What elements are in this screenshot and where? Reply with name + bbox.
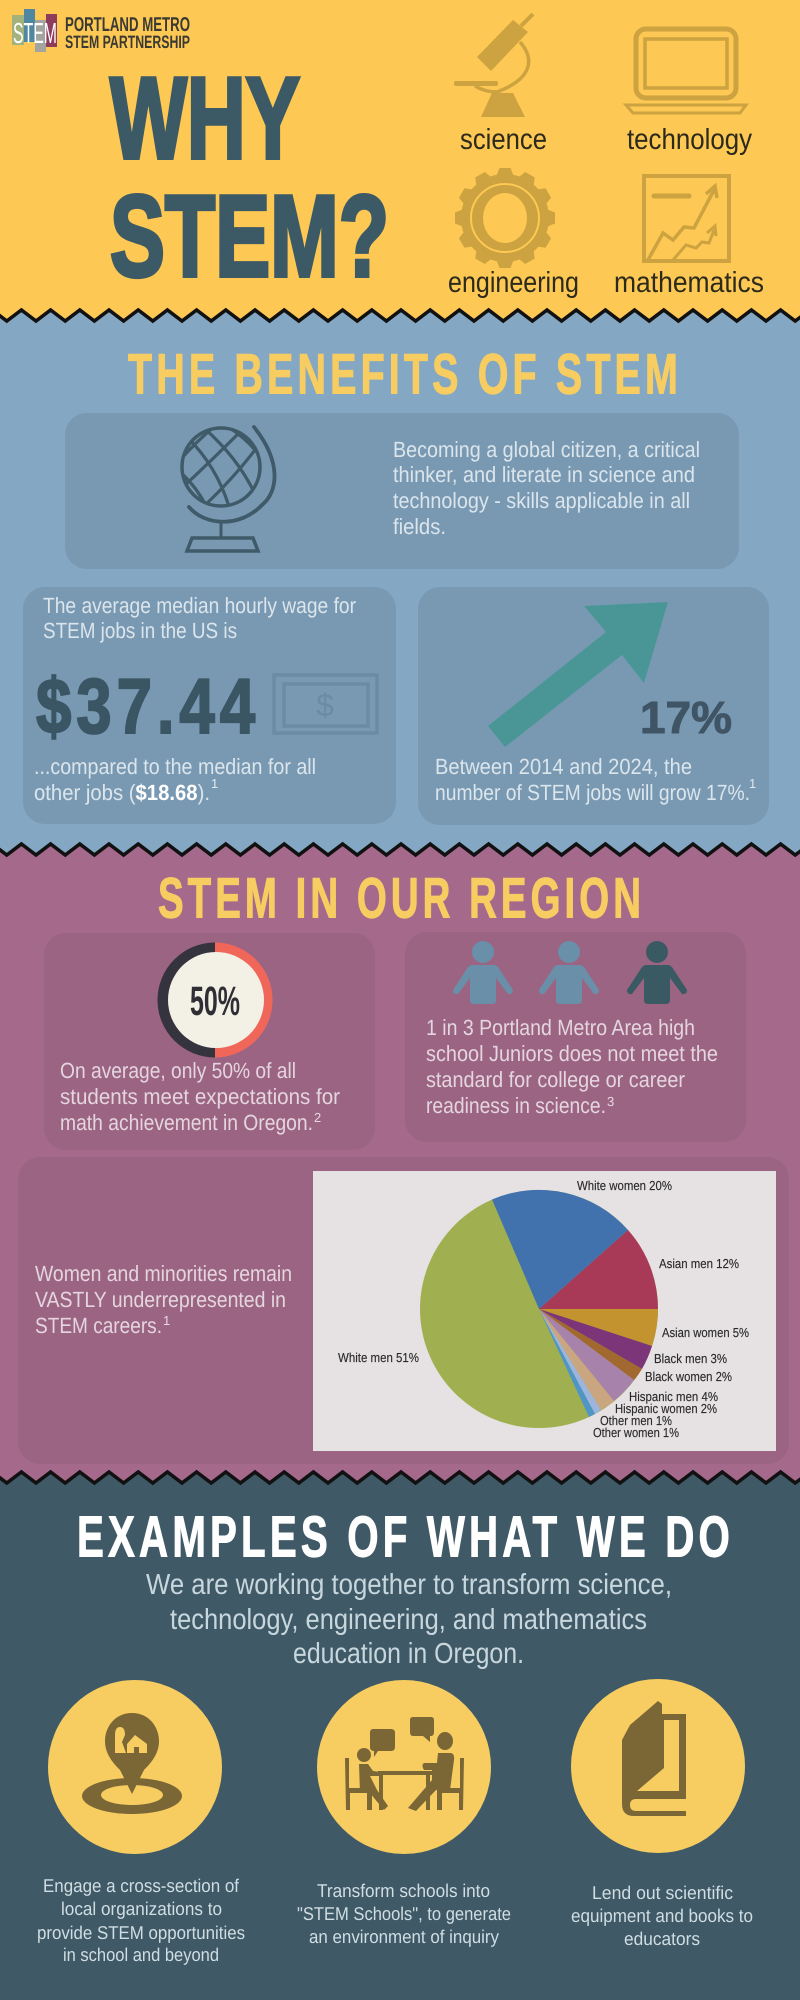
- icon: laptop: [626, 29, 746, 113]
- text: wage comparison: other jobs ($18.68).: [34, 780, 210, 805]
- logo: Portland Metro STEM Partnership: [12, 9, 190, 52]
- section background: purple region: [0, 844, 800, 1472]
- icon: gear: [455, 168, 555, 268]
- chart: STEM workforce pie: Black men 3%: [654, 1351, 727, 1366]
- panel: job growth: [418, 587, 769, 825]
- icon: person two: [539, 941, 599, 1004]
- title: Why STEM?: STEM?: [110, 171, 389, 301]
- logo: Portland Metro STEM Partnership: PORTLAND METRO: [65, 14, 190, 36]
- label: mathematics: mathematics: [614, 267, 764, 299]
- caption: transform schools: an environment of inquiry: [309, 1926, 500, 1947]
- chart: STEM workforce pie: Asian women 5%: [662, 1325, 749, 1340]
- chart: STEM workforce pie: Hispanic men 4%: [629, 1389, 718, 1404]
- figure: $37.44: $37.44: [36, 662, 260, 750]
- panel: underrepresentation: [18, 1157, 789, 1464]
- caption: engage organizations: local organizations to: [61, 1898, 222, 1919]
- icon: microscope: [454, 14, 533, 117]
- text: college readiness: 3: [607, 1094, 614, 1109]
- icon: dollar bill: [274, 675, 377, 733]
- chart: STEM workforce pie: [313, 1171, 776, 1451]
- text: job growth: number of STEM jobs will grow 17%.: [435, 780, 750, 805]
- text: college readiness: standard for college or career: [426, 1067, 685, 1092]
- title: Why STEM?: WHY: [110, 53, 300, 183]
- caption: engage organizations: Engage a cross-section of: [43, 1875, 240, 1896]
- chart: 50% donut: [157, 942, 272, 1058]
- section background: blue benefits: [0, 310, 800, 844]
- logo: Portland Metro STEM Partnership: STEM: [13, 18, 57, 50]
- text: wage comparison: ...compared to the median for all: [34, 754, 316, 779]
- icon: people meeting at a table: [317, 1680, 491, 1854]
- text: intro statement: technology, engineering, and mathematics: [170, 1604, 647, 1636]
- text: intro statement: education in Oregon.: [293, 1638, 524, 1670]
- panel: college readiness: [405, 932, 746, 1142]
- icon: location pin with farm: [48, 1680, 222, 1854]
- text: women and minorities: Women and minorities remain: [35, 1261, 292, 1286]
- caption: lend equipment: educators: [624, 1928, 700, 1949]
- logo: Portland Metro STEM Partnership: STEM PARTNERSHIP: [65, 32, 190, 52]
- panel: math achievement: [44, 933, 375, 1150]
- text: intro statement: We are working together to transform science,: [146, 1569, 672, 1601]
- chart: STEM workforce pie: White men 51%: [338, 1350, 419, 1365]
- text: women and minorities: [35, 1261, 292, 1338]
- panel: median wage: [23, 587, 396, 824]
- caption: engage organizations: [37, 1875, 245, 1965]
- caption: engage organizations: in school and beyond: [63, 1944, 219, 1965]
- text: wage intro: STEM jobs in the US is: [43, 618, 237, 643]
- text: college readiness: school Juniors does not meet the: [426, 1041, 718, 1066]
- text: global citizen: thinker, and literate in science and: [393, 462, 695, 487]
- text: wage comparison: 1: [211, 776, 218, 791]
- icon: dollar bill: $: [316, 687, 334, 723]
- icon: growth arrow: [488, 602, 668, 747]
- text: math achievement: On average, only 50% of all: [60, 1058, 296, 1083]
- section background: yellow header: [0, 0, 800, 310]
- text: wage intro: [43, 593, 356, 643]
- text: global citizen: fields.: [393, 514, 446, 539]
- text: college readiness: 1 in 3 Portland Metro Area high: [426, 1015, 695, 1040]
- chart: STEM workforce pie: Black women 2%: [645, 1369, 732, 1384]
- text: global citizen: Becoming a global citizen, a critical: [393, 437, 700, 462]
- text: college readiness: [426, 1015, 718, 1118]
- chart: STEM workforce pie: Other men 1%: [600, 1413, 672, 1428]
- caption: engage organizations: provide STEM opportunities: [37, 1922, 245, 1943]
- chart: STEM workforce pie: Other women 1%: [593, 1425, 679, 1440]
- title: Why STEM?: [110, 53, 389, 301]
- chart: STEM workforce pie: Asian men 12%: [659, 1256, 739, 1271]
- chart: STEM workforce pie: Hispanic women 2%: [615, 1401, 717, 1416]
- caption: lend equipment: equipment and books to: [571, 1905, 753, 1926]
- label: technology: technology: [627, 124, 752, 156]
- icon: person one: [453, 941, 513, 1004]
- text: women and minorities: VASTLY underrepresented in: [35, 1287, 286, 1312]
- label: engineering: engineering: [448, 267, 579, 299]
- chart: STEM workforce pie: White women 20%: [577, 1178, 672, 1193]
- text: job growth: [435, 754, 756, 805]
- text: math achievement: math achievement in Oregon.: [60, 1110, 313, 1135]
- chart: 50% donut: 50%: [190, 978, 240, 1024]
- caption: lend equipment: Lend out scientific: [592, 1882, 733, 1903]
- text: women and minorities: 1: [163, 1313, 170, 1328]
- text: global citizen: [393, 437, 700, 539]
- text: college readiness: readiness in science.: [426, 1093, 606, 1118]
- section background: slate examples: [0, 1472, 800, 2000]
- label: science: science: [460, 124, 547, 156]
- figure: 17%: 17%: [640, 692, 732, 743]
- text: math achievement: 2: [314, 1110, 321, 1125]
- icon: globe: [180, 425, 275, 551]
- caption: transform schools: [297, 1880, 511, 1947]
- text: global citizen: technology - skills applicable in all: [393, 488, 690, 513]
- icon: mathematics chart: [644, 176, 729, 261]
- icon: person three: [627, 941, 687, 1004]
- text: job growth: 1: [749, 776, 756, 791]
- text: job growth: Between 2014 and 2024, the: [435, 754, 692, 779]
- caption: transform schools: "STEM Schools", to generate: [297, 1903, 511, 1924]
- text: math achievement: students meet expectations for: [60, 1084, 340, 1109]
- text: women and minorities: STEM careers.: [35, 1313, 162, 1338]
- icon: book: [571, 1679, 745, 1853]
- text: wage intro: The average median hourly wage for: [43, 593, 356, 618]
- panel: global citizen: [65, 413, 739, 569]
- text: math achievement: [60, 1058, 340, 1135]
- caption: lend equipment: [571, 1882, 753, 1949]
- caption: transform schools: Transform schools into: [317, 1880, 490, 1901]
- text: wage comparison: [34, 754, 316, 805]
- text: intro statement: [146, 1569, 672, 1670]
